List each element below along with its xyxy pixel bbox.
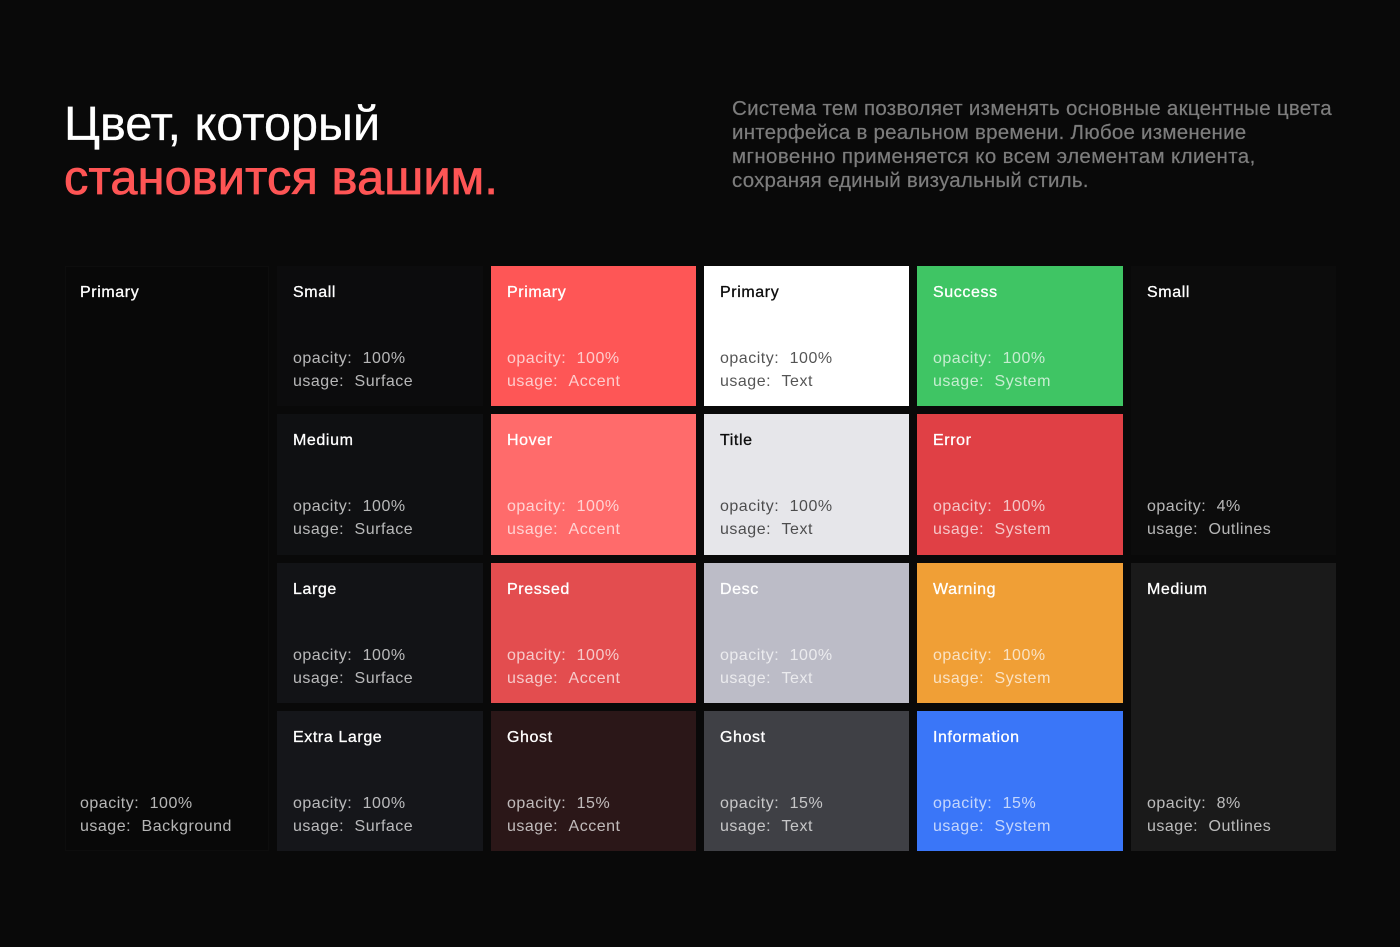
panel: accent pressed: usage: Accent [507,670,620,687]
panel: surface extra large: usage: Surface [293,818,413,835]
panel: system warning: opacity: 100% [933,646,1046,664]
panel: surface medium: opacity: 100% [293,498,406,514]
panel: outlines medium: usage: Outlines [1147,818,1271,835]
panel: accent ghost: opacity: 15% [507,794,610,812]
panel: accent ghost: usage: Accent [507,818,620,835]
panel: text desc [704,563,909,703]
panel: system warning: Warning [933,581,996,598]
panel: accent primary: opacity: 100% [507,350,620,366]
panel: system error: Error [933,432,972,449]
panel: text title: usage: Text [720,521,813,538]
panel: text ghost: Ghost [720,729,766,746]
panel: surface medium: Medium [293,432,354,449]
panel: surface large: opacity: 100% [293,646,406,664]
panel: surface small: usage: Surface [293,373,413,390]
panel: system warning [917,563,1123,703]
panel: background primary: usage: Background [80,818,232,835]
description: сохраняя единый визуальный стиль. [732,169,1089,192]
panel: text ghost [704,711,909,851]
panel: text primary [704,266,909,406]
panel: surface small: Small [293,284,336,301]
description: Система тем позволяет изменять основные акцентные цвета [732,97,1332,120]
description [732,97,1332,192]
panel: text desc: Desc [720,581,759,598]
panel: text primary: Primary [720,284,779,301]
panel: system information: Information [933,729,1020,746]
panel: text desc: usage: Text [720,670,813,687]
panel: accent hover: usage: Accent [507,521,620,538]
title line 1: Цвет, который [64,97,380,151]
panel: accent ghost [491,711,696,851]
panel: surface small [277,266,483,406]
panel: outlines small: opacity: 4% [1147,498,1241,514]
panel: system error: usage: System [933,521,1051,538]
panel: outlines medium: Medium [1147,581,1208,598]
panel: surface large: usage: Surface [293,670,413,687]
panel: system information: opacity: 15% [933,794,1036,812]
panel: outlines small [1131,266,1336,555]
panel: system success [917,266,1123,406]
panel: text title: opacity: 100% [720,498,833,514]
panel: outlines medium: opacity: 8% [1147,794,1241,812]
panel: text primary: usage: Text [720,373,813,390]
panel: accent hover: Hover [507,432,553,449]
panel: outlines medium [1131,563,1336,851]
panel: accent hover: opacity: 100% [507,498,620,514]
panel: surface extra large: Extra Large [293,729,382,746]
panel: system warning: usage: System [933,670,1051,687]
panel: text title: Title [720,432,753,449]
panel: accent pressed: Pressed [507,581,570,598]
panel: background primary: Primary [80,284,139,301]
description: интерфейса в реальном времени. Любое изменение [732,121,1246,144]
panel: background primary [65,266,269,851]
panel: accent primary: Primary [507,284,566,301]
panel: system error: opacity: 100% [933,498,1046,514]
panel: accent pressed: opacity: 100% [507,646,620,664]
panel: surface large [277,563,483,703]
panel: text ghost: opacity: 15% [720,794,823,812]
panel: accent pressed [491,563,696,703]
panel: surface medium [277,414,483,555]
panel: text title [704,414,909,555]
title [64,97,498,205]
panel: surface medium: usage: Surface [293,521,413,538]
description: мгновенно применяется ко всем элементам клиента, [732,145,1256,168]
panel: text desc: opacity: 100% [720,646,833,664]
panel: system error [917,414,1123,555]
title line 2: становится вашим. [64,151,498,205]
panel: system success: usage: System [933,373,1051,390]
panel: accent primary: usage: Accent [507,373,620,390]
panel: surface small: opacity: 100% [293,350,406,366]
panel: outlines small: usage: Outlines [1147,521,1271,538]
panel: text ghost: usage: Text [720,818,813,835]
panel: system success: opacity: 100% [933,350,1046,366]
panel: system information [917,711,1123,851]
panel: outlines small: Small [1147,284,1190,301]
panel: accent primary [491,266,696,406]
panel: surface large: Large [293,581,337,598]
panel: system information: usage: System [933,818,1051,835]
panel: text primary: opacity: 100% [720,350,833,366]
panel: surface extra large [277,711,483,851]
panel: surface extra large: opacity: 100% [293,794,406,812]
panel: system success: Success [933,284,998,301]
panel: background primary: opacity: 100% [80,794,193,812]
panel: accent ghost: Ghost [507,729,553,746]
panel: accent hover [491,414,696,555]
